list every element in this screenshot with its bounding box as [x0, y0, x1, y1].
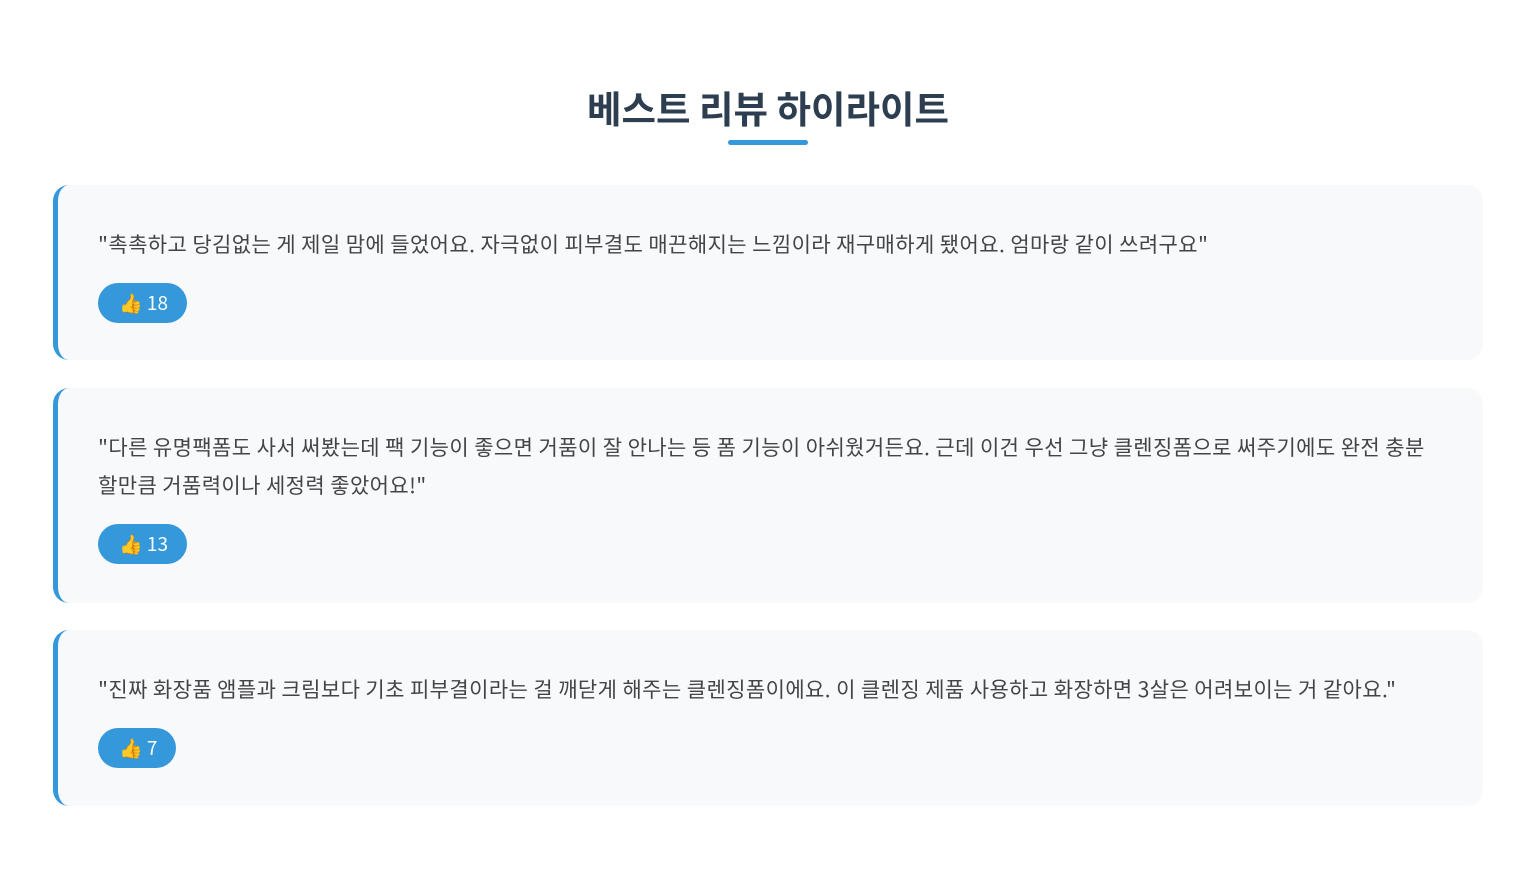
- card: review 1: [53, 185, 1483, 360]
- like badge 1: 👍 18: [119, 289, 168, 316]
- like badge 2: 👍 13: [119, 530, 168, 557]
- title: 베스트 리뷰 하이라이트: [587, 79, 949, 134]
- like badge 3: 👍 7: [119, 734, 157, 761]
- like badge 1: [98, 283, 187, 323]
- review text 2: "다른 유명팩폼도 사서 써봤는데 팩 기능이 좋으면 거품이 잘 안나는 등 폼 기능이 아쉬웠거든요. 근데 이건 우선 그냥 클렌징폼으로 써주기에도 완전 충분할만큼 거품력이나 세정력 좋았어요!": [98, 432, 1425, 500]
- card: review 2: [53, 388, 1483, 603]
- title underline: [728, 140, 808, 145]
- like badge 2: [98, 524, 187, 564]
- review text 3: "진짜 화장품 앰플과 크림보다 기초 피부결이라는 걸 깨닫게 해주는 클렌징폼이에요. 이 클렌징 제품 사용하고 화장하면 3살은 어려보이는 거 같아요.": [98, 674, 1396, 704]
- card: review 3: [53, 630, 1483, 806]
- like badge 3: [98, 728, 176, 768]
- review text 1: "촉촉하고 당김없는 게 제일 맘에 들었어요. 자극없이 피부결도 매끈해지는 느낌이라 재구매하게 됐어요. 엄마랑 같이 쓰려구요": [98, 229, 1208, 259]
